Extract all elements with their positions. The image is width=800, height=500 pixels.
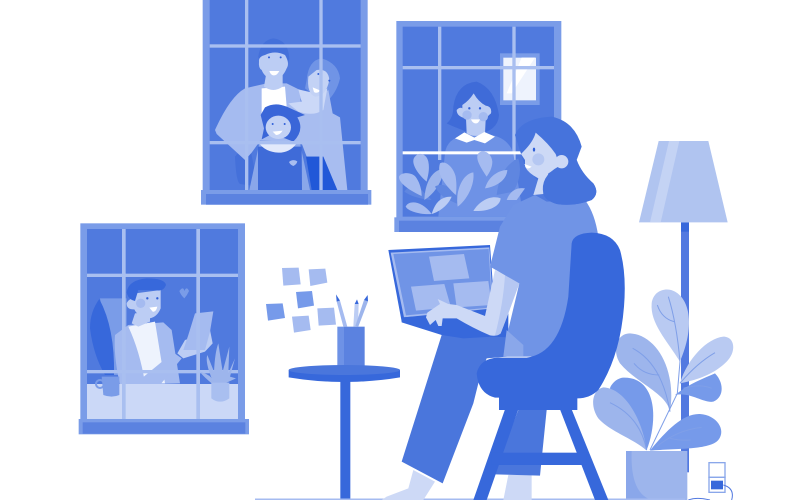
chair in window [90, 298, 127, 375]
window bars [87, 229, 238, 419]
man in family window [215, 38, 303, 187]
window bars [210, 0, 361, 191]
window sill [79, 419, 249, 434]
white ledge [403, 151, 521, 154]
wall picture [500, 53, 540, 105]
front leg, foot, laptop, arm [382, 245, 520, 500]
table [289, 365, 400, 500]
sticky notes [266, 268, 336, 333]
window bars [403, 27, 554, 160]
wall socket and cable [688, 463, 732, 500]
side table with notes and pencils [266, 268, 400, 500]
heart icon [179, 288, 189, 298]
seated woman [382, 117, 625, 500]
lamp [639, 141, 728, 472]
window sill [201, 190, 371, 205]
window: woman and plants [394, 21, 561, 232]
floor line [255, 498, 685, 500]
man in window [115, 278, 213, 395]
floor lamp, plant and socket [593, 141, 733, 500]
potted plant [200, 343, 236, 402]
shirt [490, 195, 598, 357]
girl in family window [249, 104, 310, 190]
potted plant [593, 289, 733, 500]
woman in family window [288, 58, 347, 190]
pencil cup [337, 327, 365, 367]
window: family of three [201, 0, 371, 205]
woman in window [438, 82, 523, 217]
window sill [394, 217, 504, 232]
coffee mug [96, 377, 119, 397]
head and hair [515, 117, 596, 205]
pencils [336, 294, 368, 327]
arm [426, 270, 520, 336]
chair [473, 233, 625, 500]
desk [87, 384, 238, 419]
window: man with tablet [79, 223, 249, 434]
back lower leg and foot [495, 410, 547, 500]
plants in window [399, 151, 525, 214]
laptop [388, 245, 508, 338]
